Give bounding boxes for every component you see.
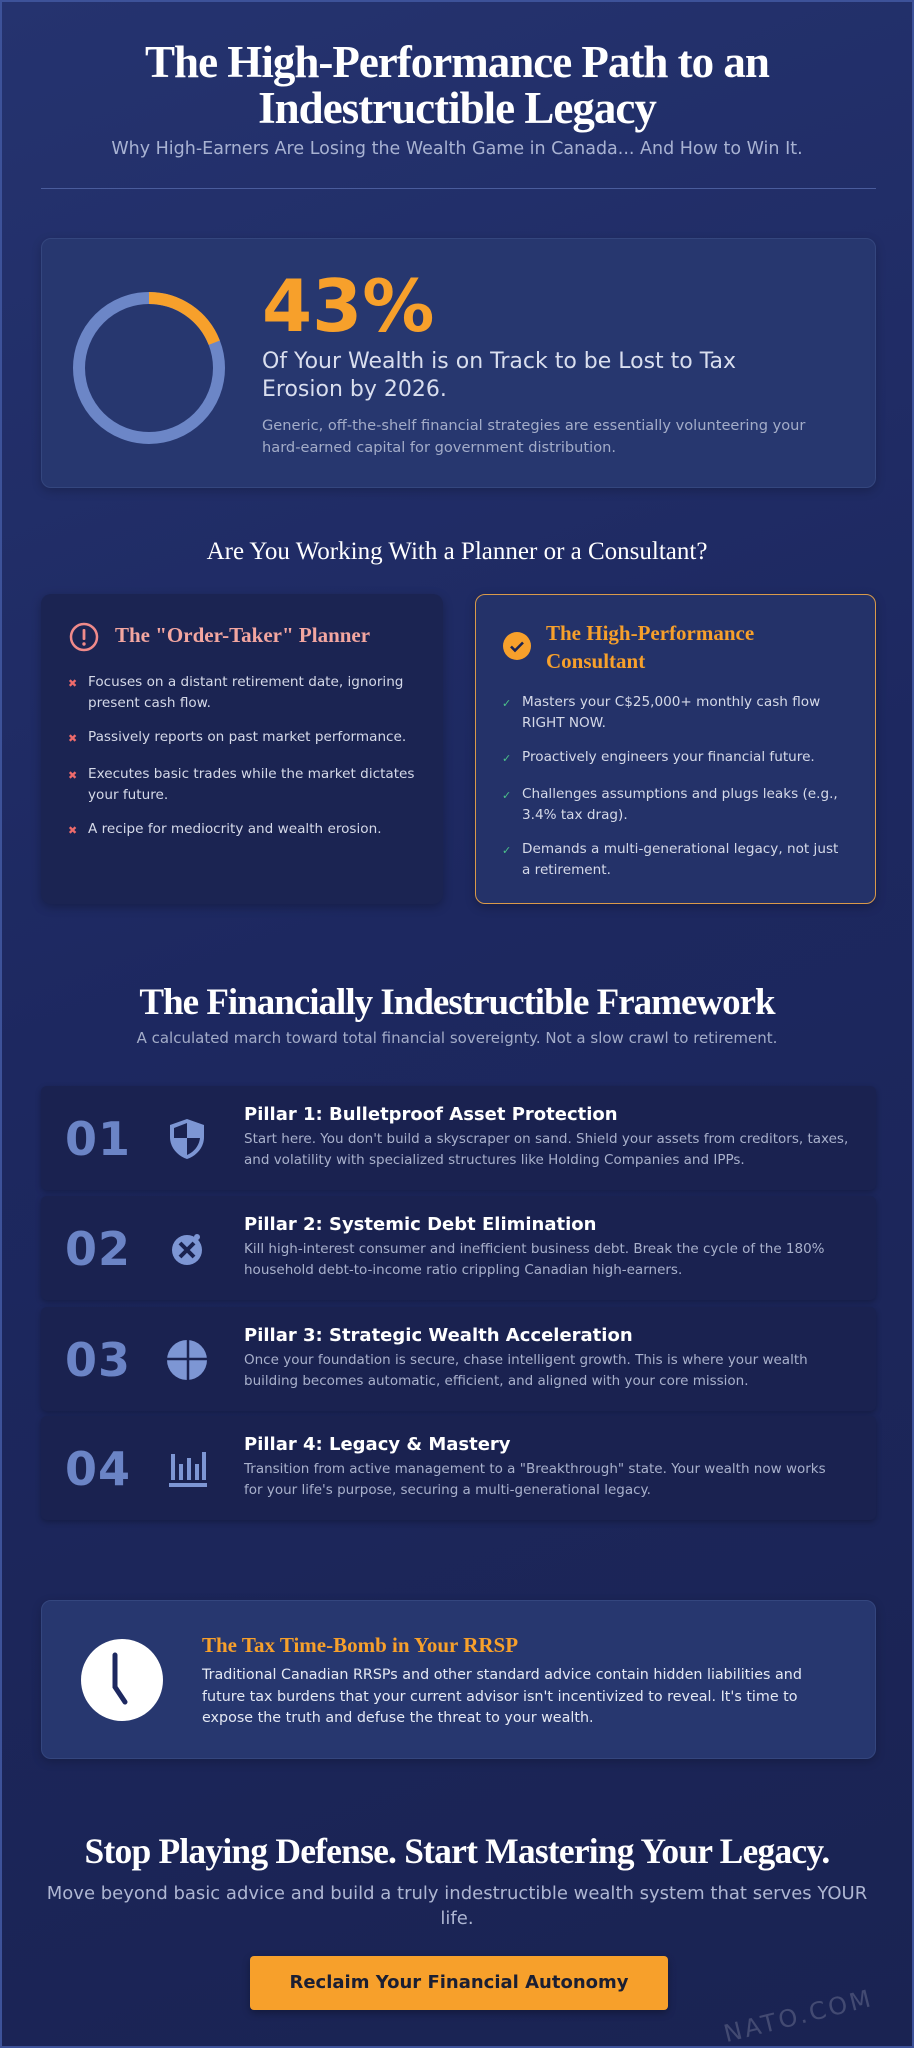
pillar 2: Pillar 2: Systemic Debt Elimination <box>244 1214 596 1235</box>
pillar 2: 02 <box>65 1222 131 1276</box>
panel: order-taker planner: Executes basic trades while the market dictates <box>88 766 415 782</box>
closing text <box>47 1883 867 1929</box>
pillar 3: Once your foundation is secure, chase intelligent growth. This is where your wealth <box>244 1352 808 1368</box>
panel: order-taker planner: Focuses on a distant retirement date, ignoring <box>88 674 403 690</box>
panel: high-performance consultant: ✓ <box>502 844 511 857</box>
pillar 1: 01 <box>65 1112 131 1166</box>
pillar 4 <box>41 1416 876 1520</box>
pillar 1 <box>41 1086 876 1190</box>
closing heading: Stop Playing Defense. Start Mastering Your Legacy. <box>85 1831 829 1871</box>
pillar 1: and volatility with specialized structures like Holding Companies and IPPs. <box>244 1152 745 1168</box>
pillar 4: Transition from active management to a "Breakthrough" state. Your wealth now works <box>244 1461 826 1477</box>
framework subtitle: A calculated march toward total financial sovereignty. Not a slow crawl to retirement. <box>137 1029 777 1047</box>
callout text: expose the truth and defuse the threat to your wealth. <box>202 1710 594 1726</box>
icon: check <box>503 632 531 660</box>
watermark: NATO.COM <box>721 1984 876 2048</box>
panel: high-performance consultant: ✓ <box>502 697 511 710</box>
callout text <box>202 1667 802 1726</box>
pillar 4: 04 <box>65 1442 131 1496</box>
pillar 2: Kill high-interest consumer and inefficient business debt. Break the cycle of the 180% <box>244 1241 825 1257</box>
button: CTA <box>250 1956 668 2010</box>
pillar 2 <box>41 1196 876 1300</box>
icon: debt x <box>172 1234 202 1265</box>
panel: order-taker planner: ✖ <box>68 677 77 690</box>
heading: framework: The Financially Indestructible Framework <box>139 982 775 1023</box>
callout text: Traditional Canadian RRSPs and other standard advice contain hidden liabilities and <box>202 1667 802 1683</box>
pillar 1: Pillar 1: Bulletproof Asset Protection <box>244 1104 618 1125</box>
list <box>502 694 838 878</box>
panel: high-performance consultant: Demands a multi-generational legacy, not just <box>522 841 838 857</box>
subtitle: Why High-Earners Are Losing the Wealth Game in Canada... And How to Win It. <box>111 139 803 159</box>
heading <box>546 621 754 673</box>
panel: order-taker planner: ✖ <box>68 769 77 782</box>
chart: donut 43% <box>73 292 225 444</box>
panel: high-performance consultant: RIGHT NOW. <box>522 715 606 731</box>
heading: The "Order-Taker" Planner <box>115 623 370 647</box>
callout text: future tax burdens that your current advisor isn't incentivized to reveal. It's time to <box>202 1688 798 1704</box>
pillar 2: household debt-to-income ratio crippling Canadian high-earners. <box>244 1262 682 1278</box>
pillar 3: Pillar 3: Strategic Wealth Acceleration <box>244 1325 633 1346</box>
heading: planner vs consultant: Are You Working With a Planner or a Consultant? <box>207 538 707 565</box>
icon: pie <box>167 1340 207 1380</box>
panel: order-taker planner: Passively reports on past market performance. <box>88 729 406 745</box>
callout: tax time-bomb <box>41 1600 876 1759</box>
panel: order-taker planner: your future. <box>88 787 168 803</box>
stat label: Of Your Wealth is on Track to be Lost to Tax <box>262 349 736 374</box>
callout title: The Tax Time-Bomb in Your RRSP <box>202 1633 518 1657</box>
icon: shield <box>170 1119 204 1159</box>
pillar 3 <box>41 1307 876 1411</box>
panel: high-performance consultant: Masters your C$25,000+ monthly cash flow <box>522 694 820 710</box>
panel: order-taker planner <box>41 594 443 904</box>
panel: high-performance consultant: ✓ <box>502 752 511 765</box>
panel: high-performance consultant: ✓ <box>502 789 511 802</box>
stat description: hard-earned capital for government distribution. <box>262 439 616 456</box>
icon: clock <box>81 1639 163 1721</box>
panel: order-taker planner: ✖ <box>68 732 77 745</box>
stat label <box>262 349 736 402</box>
pillar 1: Start here. You don't build a skyscraper on sand. Shield your assets from creditors, taxes, <box>244 1131 848 1147</box>
panel: high-performance consultant: Proactively engineers your financial future. <box>522 749 815 765</box>
panel: 43% stat <box>41 238 876 488</box>
icon: warning <box>70 622 98 652</box>
pillar 3: 03 <box>65 1333 131 1387</box>
pillar 4: for your life's purpose, securing a multi-generational legacy. <box>244 1482 651 1498</box>
panel: high-performance consultant: 3.4% tax drag). <box>522 807 628 823</box>
panel: order-taker planner: present cash flow. <box>88 695 211 711</box>
list <box>68 674 415 837</box>
panel: high-performance consultant: Challenges assumptions and plugs leaks (e.g., <box>522 786 838 802</box>
title <box>145 37 770 133</box>
stat description: Generic, off-the-shelf financial strategies are essentially volunteering your <box>262 417 805 434</box>
title: Indestructible Legacy <box>258 83 656 133</box>
panel: high-performance consultant: a retirement. <box>522 862 611 878</box>
stat label: Erosion by 2026. <box>262 377 447 402</box>
heading: The High-Performance <box>546 621 754 645</box>
panel: order-taker planner: ✖ <box>68 824 77 837</box>
stat description <box>262 417 806 456</box>
pillar 4: Pillar 4: Legacy & Mastery <box>244 1434 511 1455</box>
stat number: 43% <box>262 264 434 348</box>
panel: order-taker planner: A recipe for mediocrity and wealth erosion. <box>88 821 382 837</box>
closing text: life. <box>440 1908 474 1929</box>
button: CTA: Reclaim Your Financial Autonomy <box>289 1972 628 1993</box>
title: The High-Performance Path to an <box>145 37 769 87</box>
panel: high-performance consultant <box>475 594 876 904</box>
heading: Consultant <box>546 649 645 673</box>
closing text: Move beyond basic advice and build a truly indestructible wealth system that serves YOUR <box>47 1883 867 1904</box>
pillar 3: building becomes automatic, efficient, and aligned with your core mission. <box>244 1373 749 1389</box>
icon: bar chart <box>169 1452 207 1487</box>
